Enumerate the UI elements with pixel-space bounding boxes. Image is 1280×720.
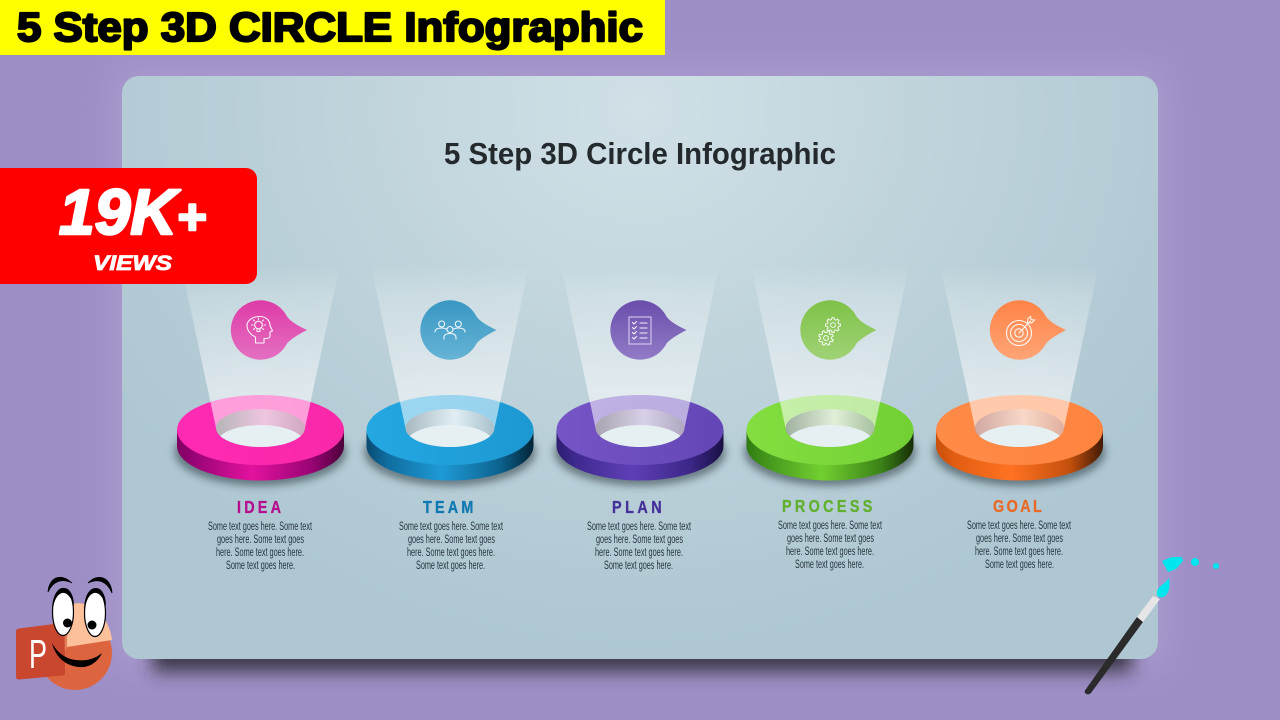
top banner: 5 Step 3D CIRCLE Infographic bbox=[17, 4, 643, 50]
callout with target icon bbox=[990, 300, 1066, 360]
step 1: idea bbox=[174, 265, 346, 572]
heading: 5 Step 3D Circle Infographic bbox=[444, 136, 836, 171]
callout with checklist icon bbox=[610, 300, 686, 360]
body text: goes here. Some text goes bbox=[596, 534, 683, 546]
step 2: team bbox=[364, 265, 536, 572]
disc: orange ring bbox=[934, 265, 1106, 486]
body text bbox=[587, 521, 692, 572]
smile bbox=[52, 643, 102, 667]
disc: green ring bbox=[744, 265, 916, 486]
label: TEAM: TEAM bbox=[423, 498, 473, 517]
views badge: VIEWS bbox=[93, 252, 172, 275]
body text: goes here. Some text goes bbox=[217, 534, 304, 546]
label: PLAN: PLAN bbox=[612, 498, 662, 517]
body text: Some text goes here. Some text bbox=[778, 520, 883, 532]
left eye bbox=[52, 588, 74, 636]
body text: here. Some text goes here. bbox=[407, 547, 495, 559]
disc: blue ring bbox=[364, 265, 536, 486]
card glow bbox=[112, 66, 1168, 669]
step 4: process bbox=[744, 265, 916, 571]
body text bbox=[208, 521, 313, 572]
body text bbox=[778, 520, 883, 571]
body text: here. Some text goes here. bbox=[786, 546, 874, 558]
body text: goes here. Some text goes bbox=[408, 534, 495, 546]
step 5: goal bbox=[934, 265, 1106, 571]
body text: Some text goes here. Some text bbox=[967, 520, 1072, 532]
PowerPoint tile: P bbox=[29, 631, 47, 677]
label: IDEA: IDEA bbox=[237, 498, 281, 517]
body text: here. Some text goes here. bbox=[975, 546, 1063, 558]
callout with brain icon bbox=[231, 300, 307, 360]
body text: Some text goes here. bbox=[795, 559, 864, 571]
mascot: PowerPoint face bbox=[16, 577, 112, 690]
label: PROCESS: PROCESS bbox=[782, 497, 873, 516]
body text: Some text goes here. Some text bbox=[399, 521, 504, 533]
label: GOAL: GOAL bbox=[993, 497, 1042, 516]
views badge: 19K+ bbox=[59, 176, 206, 248]
step 3: plan bbox=[554, 265, 726, 572]
callout with gears icon bbox=[800, 300, 876, 360]
paint brush with splash bbox=[1085, 557, 1219, 694]
body text: goes here. Some text goes bbox=[976, 533, 1063, 545]
callout with team icon bbox=[420, 300, 496, 360]
body text: Some text goes here. Some text bbox=[587, 521, 692, 533]
body text: goes here. Some text goes bbox=[787, 533, 874, 545]
body text bbox=[967, 520, 1072, 571]
body text: Some text goes here. bbox=[416, 560, 485, 572]
body text bbox=[399, 521, 504, 572]
body text: here. Some text goes here. bbox=[595, 547, 683, 559]
card shadow bbox=[152, 636, 1132, 672]
body text: here. Some text goes here. bbox=[216, 547, 304, 559]
body text: Some text goes here. Some text bbox=[208, 521, 313, 533]
right eye bbox=[84, 588, 106, 636]
disc: purple ring bbox=[554, 265, 726, 486]
disc: pink ring bbox=[174, 265, 346, 486]
body text: Some text goes here. bbox=[604, 560, 673, 572]
body text: Some text goes here. bbox=[226, 560, 295, 572]
eyebrows bbox=[48, 577, 112, 593]
body text: Some text goes here. bbox=[985, 559, 1054, 571]
panel: main card bbox=[122, 76, 1158, 659]
views badge bbox=[0, 168, 257, 284]
